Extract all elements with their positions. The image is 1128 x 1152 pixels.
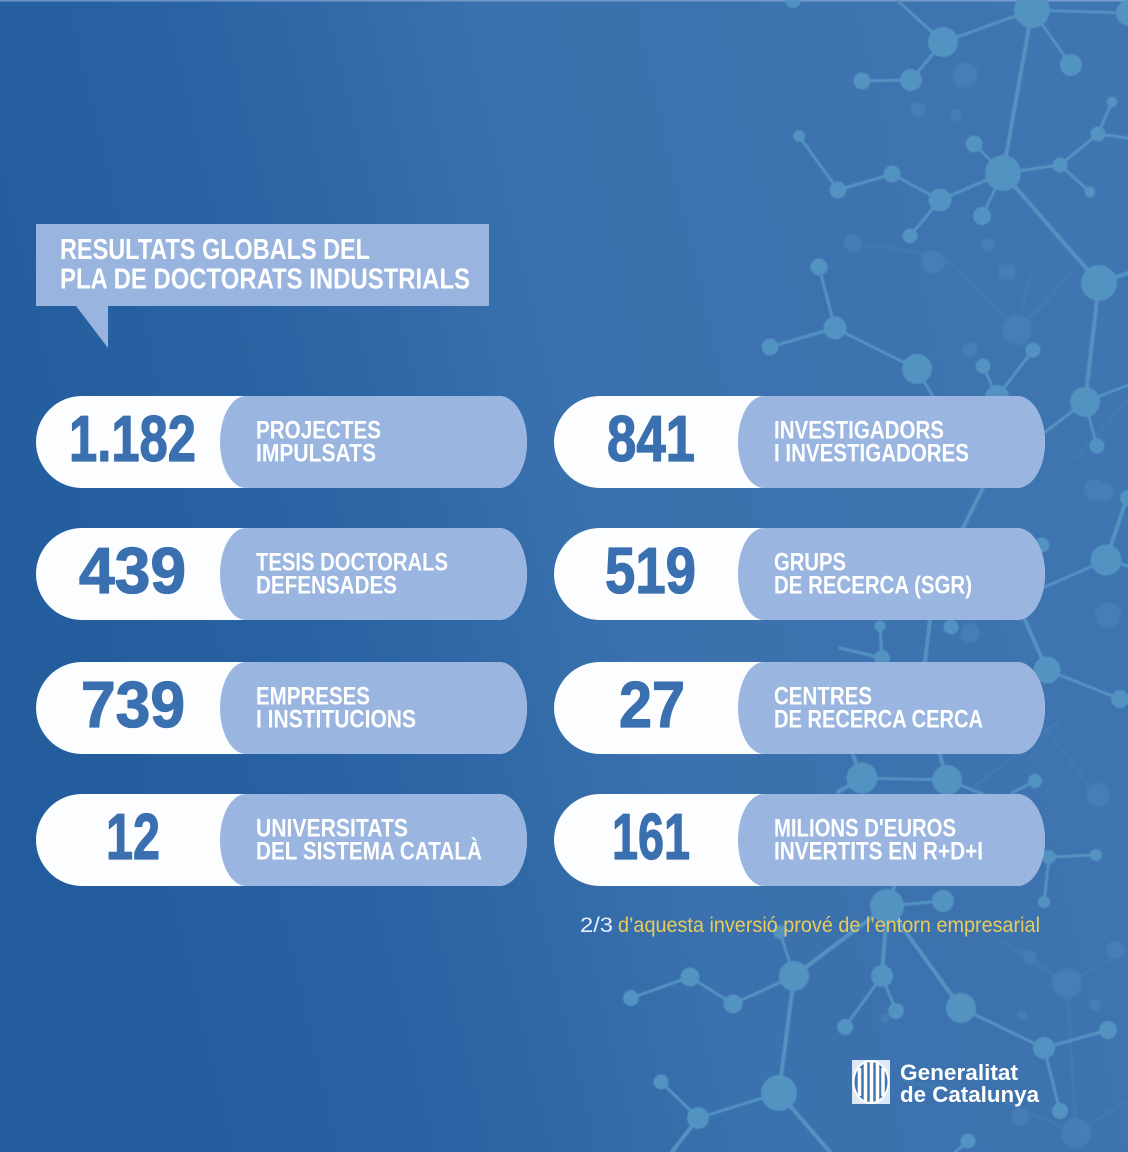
- stat: 161 milions d'euros: MILIONS D'EUROS: [774, 814, 956, 842]
- stat: 161 milions d'euros: [554, 794, 1045, 886]
- stat: 519 grups de recerca: 519: [605, 534, 696, 607]
- stat: 27 centres de recerca: [554, 662, 1045, 754]
- stat: 841 investigadors: INVESTIGADORS: [774, 416, 944, 444]
- investment footnote: d’aquesta inversió prové de l’entorn empresarial: [618, 914, 1040, 937]
- stat: 12 universitats: 12: [106, 800, 160, 873]
- stat: 439 tesis doctorals: TESIS DOCTORALS: [256, 548, 448, 576]
- molecule network: [623, 0, 1128, 1152]
- stat: 841 investigadors: [554, 396, 1045, 488]
- stat: 739 empreses: 739: [81, 668, 185, 741]
- Generalitat de Catalunya logo: de Catalunya: [900, 1082, 1040, 1107]
- stat: 12 universitats: [36, 794, 527, 886]
- stat: 519 grups de recerca: [554, 528, 1045, 620]
- stat: 439 tesis doctorals: [36, 528, 527, 620]
- stat: 1.182 projectes impulsats: [36, 396, 527, 488]
- stat: 27 centres de recerca: CENTRES: [774, 682, 872, 710]
- title callout: [36, 224, 489, 348]
- stat: 841 investigadors: I INVESTIGADORES: [774, 440, 969, 468]
- title callout: RESULTATS GLOBALS DEL: [60, 234, 370, 266]
- stat: 27 centres de recerca: 27: [619, 668, 685, 741]
- stat: 439 tesis doctorals: 439: [79, 534, 186, 607]
- title callout: PLA DE DOCTORATS INDUSTRIALS: [60, 264, 470, 296]
- investment footnote: 2/3: [580, 914, 613, 937]
- stat: 841 investigadors: 841: [607, 402, 695, 475]
- stat: 519 grups de recerca: DE RECERCA (SGR): [774, 572, 972, 600]
- faint background molecule network: [844, 62, 1128, 1148]
- stat: 27 centres de recerca: DE RECERCA CERCA: [774, 706, 983, 734]
- stat: 739 empreses: [36, 662, 527, 754]
- stat: 161 milions d'euros: INVERTITS EN R+D+I: [774, 838, 983, 866]
- stat: 12 universitats: DEL SISTEMA CATALÀ: [256, 836, 482, 866]
- Generalitat de Catalunya logo: [852, 1060, 1040, 1107]
- icon: Generalitat seal: [852, 1060, 890, 1104]
- stat: 161 milions d'euros: 161: [612, 800, 690, 873]
- stat: 1.182 projectes impulsats: 1.182: [69, 402, 196, 475]
- stat: 739 empreses: I INSTITUCIONS: [256, 706, 416, 734]
- stat: 439 tesis doctorals: DEFENSADES: [256, 572, 397, 600]
- stat: 1.182 projectes impulsats: PROJECTES: [256, 416, 381, 444]
- stat: 739 empreses: EMPRESES: [256, 682, 370, 710]
- Generalitat de Catalunya logo: Generalitat: [900, 1060, 1019, 1085]
- stat: 1.182 projectes impulsats: IMPULSATS: [256, 440, 376, 468]
- stat: 519 grups de recerca: GRUPS: [774, 548, 846, 576]
- stat: 12 universitats: UNIVERSITATS: [256, 814, 408, 842]
